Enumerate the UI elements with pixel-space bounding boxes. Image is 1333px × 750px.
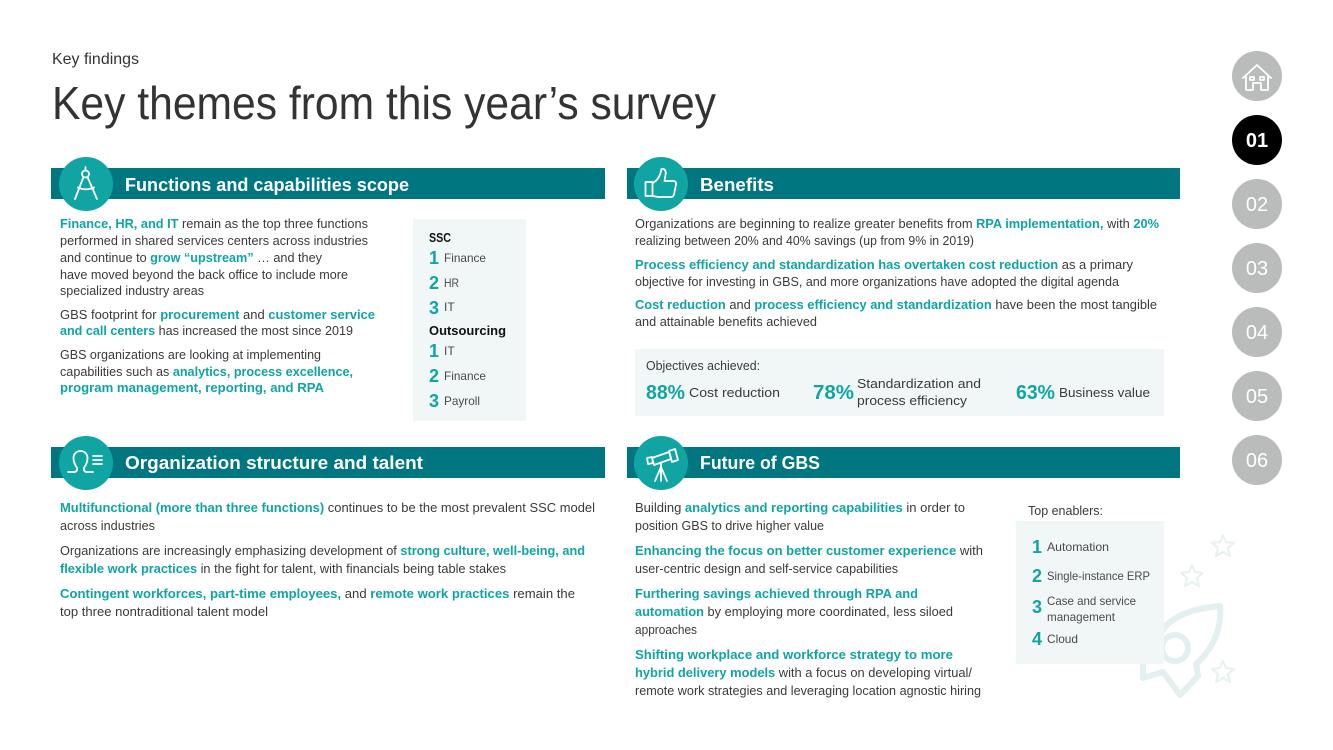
heading: future: Future of GBS	[700, 452, 820, 473]
nav: 03: 03	[1246, 258, 1268, 280]
icon: telescope	[634, 436, 688, 490]
title: Key themes from this year’s survey	[52, 77, 716, 129]
nav: home	[1232, 51, 1282, 101]
text block: benefits: and attainable benefits achieved	[635, 314, 817, 329]
callout: objectives achieved: Business value	[1059, 385, 1150, 400]
text block: future: Furthering savings achieved through RPA and	[635, 586, 918, 601]
text block: functions: Finance, HR, and IT remain as the top three functions	[60, 216, 368, 231]
nav: 02	[1232, 179, 1282, 229]
ranking table: SSC and outsourcing: IT	[444, 344, 455, 358]
text block: functions	[60, 216, 375, 395]
nav: 04	[1232, 307, 1282, 357]
callout: objectives achieved: 63%	[1016, 382, 1055, 404]
text block: benefits: Organizations are beginning to realize greater benefits from RPA implementation, with 20%	[635, 216, 1159, 231]
ranking table: SSC and outsourcing: Finance	[444, 369, 486, 383]
text block: benefits: objective for investing in GBS, and more organizations have adopted the digital agenda	[635, 274, 1120, 289]
heading: organization: Organization structure and talent	[125, 452, 423, 473]
ranking table: SSC and outsourcing: 3	[429, 298, 439, 318]
callout: objectives achieved: Objectives achieved:	[646, 358, 760, 373]
text block: organization: top three nontraditional talent model	[60, 604, 268, 619]
callout: objectives achieved: 78%	[813, 382, 854, 404]
header band: benefits	[627, 168, 1180, 199]
eyebrow: key findings: Key findings	[52, 51, 139, 68]
ranking table: SSC and outsourcing: Outsourcing	[429, 324, 506, 338]
nav: 02: 02	[1246, 194, 1268, 216]
text block: organization: Multifunctional (more than three functions) continues to be the most prevalent SSC model	[60, 500, 595, 515]
ranking: top enablers	[1016, 521, 1164, 664]
text block: functions: GBS footprint for procurement and customer service	[60, 307, 375, 322]
callout: objectives achieved: Standardization and	[857, 376, 981, 391]
text block: functions: GBS organizations are looking at implementing	[60, 347, 321, 362]
ranking table: SSC and outsourcing: 3	[429, 391, 439, 411]
ranking table: SSC and outsourcing: 1	[429, 248, 439, 268]
icon: person with list	[59, 436, 113, 490]
text block: functions: have moved beyond the back office to include more	[60, 267, 348, 282]
label: top enablers: Top enablers:	[1028, 503, 1103, 518]
callout: objectives achieved: Cost reduction	[689, 385, 780, 400]
icon: thumbs up	[634, 157, 688, 211]
text block: organization: across industries	[60, 518, 155, 533]
text block: benefits: Cost reduction and process efficiency and standardization have been the most tangible	[635, 297, 1157, 312]
ranking: top enablers: 4	[1032, 629, 1042, 649]
nav: 01 active: 01	[1246, 130, 1268, 152]
text block: future	[635, 500, 983, 698]
callout: objectives achieved: 88%	[646, 382, 685, 404]
callout: objectives achieved	[635, 349, 1164, 416]
nav: 03	[1232, 243, 1282, 293]
text block: benefits	[635, 216, 1159, 329]
nav: 01 active	[1232, 115, 1282, 165]
ranking table: SSC and outsourcing: SSC	[429, 231, 451, 245]
text block: functions: and call centers has increased the most since 2019	[60, 323, 353, 338]
ranking: top enablers: Automation	[1047, 540, 1109, 554]
nav: 04: 04	[1246, 322, 1268, 344]
header band: organization	[51, 447, 605, 478]
panel: benefits	[627, 157, 1180, 416]
text block: future: position GBS to drive higher value	[635, 518, 824, 533]
header band: functions	[51, 168, 605, 199]
ranking: top enablers: 3	[1032, 597, 1042, 617]
text block: organization: Organizations are increasingly emphasizing development of strong culture, well-being, and	[60, 543, 585, 558]
callout: objectives achieved: process efficiency	[857, 393, 968, 408]
ranking: top enablers: management	[1047, 610, 1116, 624]
nav: 05: 05	[1246, 386, 1268, 408]
text block: future: automation by employing more coordinated, less siloed	[635, 604, 953, 619]
panel: future of GBS	[627, 436, 1180, 698]
text block: future: remote work strategies and leveraging location agnostic hiring	[635, 683, 981, 698]
ranking table: SSC and outsourcing: 2	[429, 273, 439, 293]
heading: benefits: Benefits	[700, 174, 774, 195]
icon: compass	[59, 157, 113, 211]
text block: organization: Contingent workforces, part-time employees, and remote work practices remain the	[60, 586, 575, 601]
text block: organization	[60, 500, 595, 619]
text block: future: hybrid delivery models with a focus on developing virtual/	[635, 665, 972, 680]
ranking table: SSC and outsourcing: Finance	[444, 251, 486, 265]
nav: 06: 06	[1246, 450, 1268, 472]
panel: functions and capabilities scope	[51, 157, 605, 421]
heading: functions: Functions and capabilities scope	[125, 174, 409, 195]
ranking table: SSC and outsourcing: 1	[429, 341, 439, 361]
ranking table: SSC and outsourcing: Payroll	[444, 394, 480, 408]
ranking table: SSC and outsourcing: 2	[429, 366, 439, 386]
decoration: rocket and stars	[1143, 535, 1234, 695]
ranking: top enablers: 2	[1032, 566, 1042, 586]
ranking table: SSC and outsourcing	[413, 219, 526, 421]
text block: functions: program management, reporting, and RPA	[60, 380, 325, 395]
header band: future	[627, 447, 1180, 478]
text block: functions: capabilities such as analytics, process excellence,	[60, 364, 353, 379]
navigation: section buttons	[1232, 51, 1282, 485]
ranking: top enablers: Case and service	[1047, 594, 1136, 608]
nav: 06	[1232, 435, 1282, 485]
ranking table: SSC and outsourcing: IT	[444, 300, 455, 314]
nav: 05	[1232, 371, 1282, 421]
ranking table: SSC and outsourcing: HR	[444, 276, 459, 290]
text block: future: Shifting workplace and workforce strategy to more	[635, 647, 953, 662]
text block: future: Enhancing the focus on better customer experience with	[635, 543, 983, 558]
ranking: top enablers: Single-instance ERP	[1047, 569, 1150, 583]
text block: future: Building analytics and reporting capabilities in order to	[635, 500, 965, 515]
text block: functions: and continue to grow “upstream” … and they	[60, 250, 322, 265]
ranking: top enablers: 1	[1032, 537, 1042, 557]
text block: functions: specialized industry areas	[60, 283, 204, 298]
ranking: top enablers: Cloud	[1047, 632, 1078, 646]
text block: future: approaches	[635, 622, 697, 637]
text block: functions: performed in shared services centers across industries	[60, 233, 368, 248]
panel: organization structure and talent	[51, 436, 605, 619]
text block: future: user-centric design and self-service capabilities	[635, 561, 898, 576]
text block: benefits: Process efficiency and standardization has overtaken cost reduction as a primary	[635, 257, 1133, 272]
text block: benefits: realizing between 20% and 40% savings (up from 9% in 2019)	[635, 233, 974, 248]
text block: organization: flexible work practices in the fight for talent, with financials being table stakes	[60, 561, 506, 576]
